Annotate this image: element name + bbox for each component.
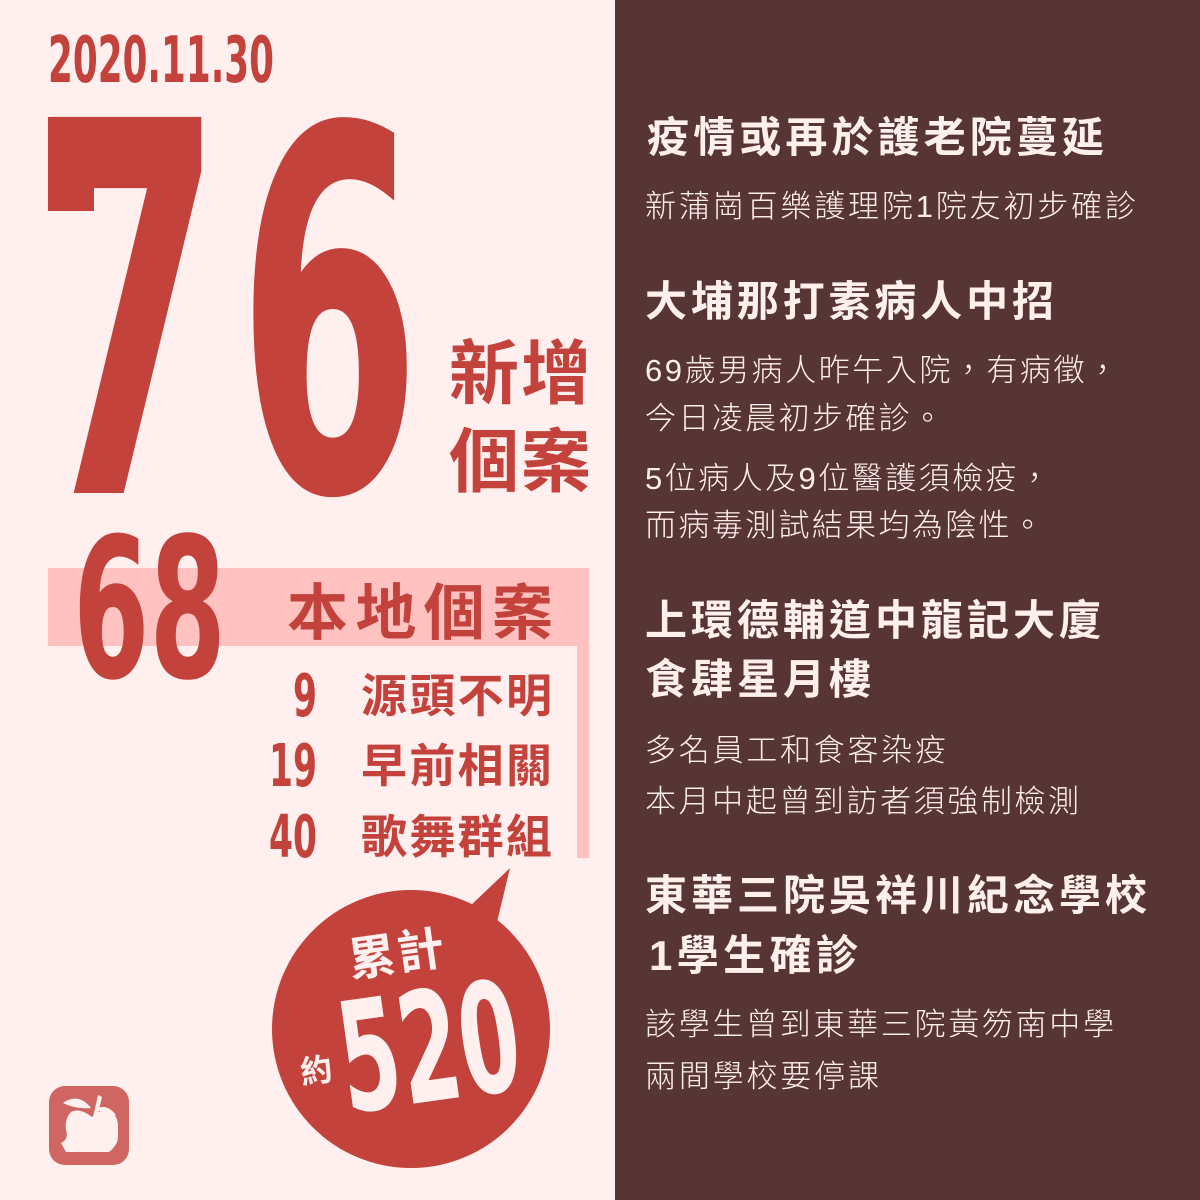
section: Tung Wah school: 兩間學校要停課 [645,1059,879,1094]
panel: left background [0,0,615,1200]
number: 68 local cases: 68 [73,496,226,723]
section: Sheung Wan restaurant [645,597,1101,819]
breakdown: earlier related: 早前相關 [361,740,552,792]
section: Tung Wah school: 該學生曾到東華三院黃笏南中學 [645,1007,1114,1042]
breakdown: source unknown: 源頭不明 [361,670,552,722]
section: Alice Ho hospital patient: 69歲男病人昨午入院，有病徵， [645,353,1118,388]
big number: 76 new cases: 6 [237,23,421,609]
label: new cases: 新增 [449,335,591,413]
breakdown: earlier related [269,731,552,800]
local cases band and side bar [48,568,589,858]
section: Sheung Wan restaurant: 上環德輔道中龍記大廈 [645,597,1101,644]
callout: cumulative total: 約 [298,1051,335,1091]
big number: 76 new cases: 7 [33,14,223,615]
icon: apple logo [49,1086,129,1165]
callout: cumulative total: 累計 [345,921,447,987]
breakdown: dance cluster [269,802,552,871]
breakdown: source unknown [293,661,552,730]
section: Tung Wah school [645,872,1147,1094]
section: Alice Ho hospital patient: 大埔那打素病人中招 [645,278,1054,325]
section: nursing home outbreak: 疫情或再於護老院蔓延 [647,114,1104,161]
panel: right background [615,0,1200,1200]
section: Tung Wah school: 1學生確診 [649,932,858,979]
breakdown: dance cluster: 40 [269,802,317,871]
breakdown: earlier related: 19 [269,731,317,800]
section: Alice Ho hospital patient [645,278,1118,543]
section: Sheung Wan restaurant: 本月中起曾到訪者須強制檢測 [645,784,1079,819]
label: new cases: 個案 [449,423,591,501]
section: Sheung Wan restaurant: 多名員工和食客染疫 [645,733,946,768]
callout: cumulative total: 520 [327,948,531,1150]
section: nursing home outbreak [645,114,1136,224]
section: Alice Ho hospital patient: 5位病人及9位醫護須檢疫， [645,461,1050,496]
label: local cases: 本地個案 [287,579,553,647]
section: Alice Ho hospital patient: 而病毒測試結果均為陰性。 [645,508,1043,543]
breakdown: dance cluster: 歌舞群組 [361,811,552,863]
callout: cumulative total [272,868,550,1168]
label: new cases [449,335,591,501]
date heading: 2020.11.30 [48,24,274,98]
section: Sheung Wan restaurant: 食肆星月樓 [645,656,871,703]
section: Alice Ho hospital patient: 今日凌晨初步確診。 [645,401,943,436]
breakdown: source unknown: 9 [293,661,317,730]
section: Tung Wah school: 東華三院吳祥川紀念學校 [645,872,1147,919]
section: nursing home outbreak: 新蒲崗百樂護理院1院友初步確診 [645,189,1136,224]
